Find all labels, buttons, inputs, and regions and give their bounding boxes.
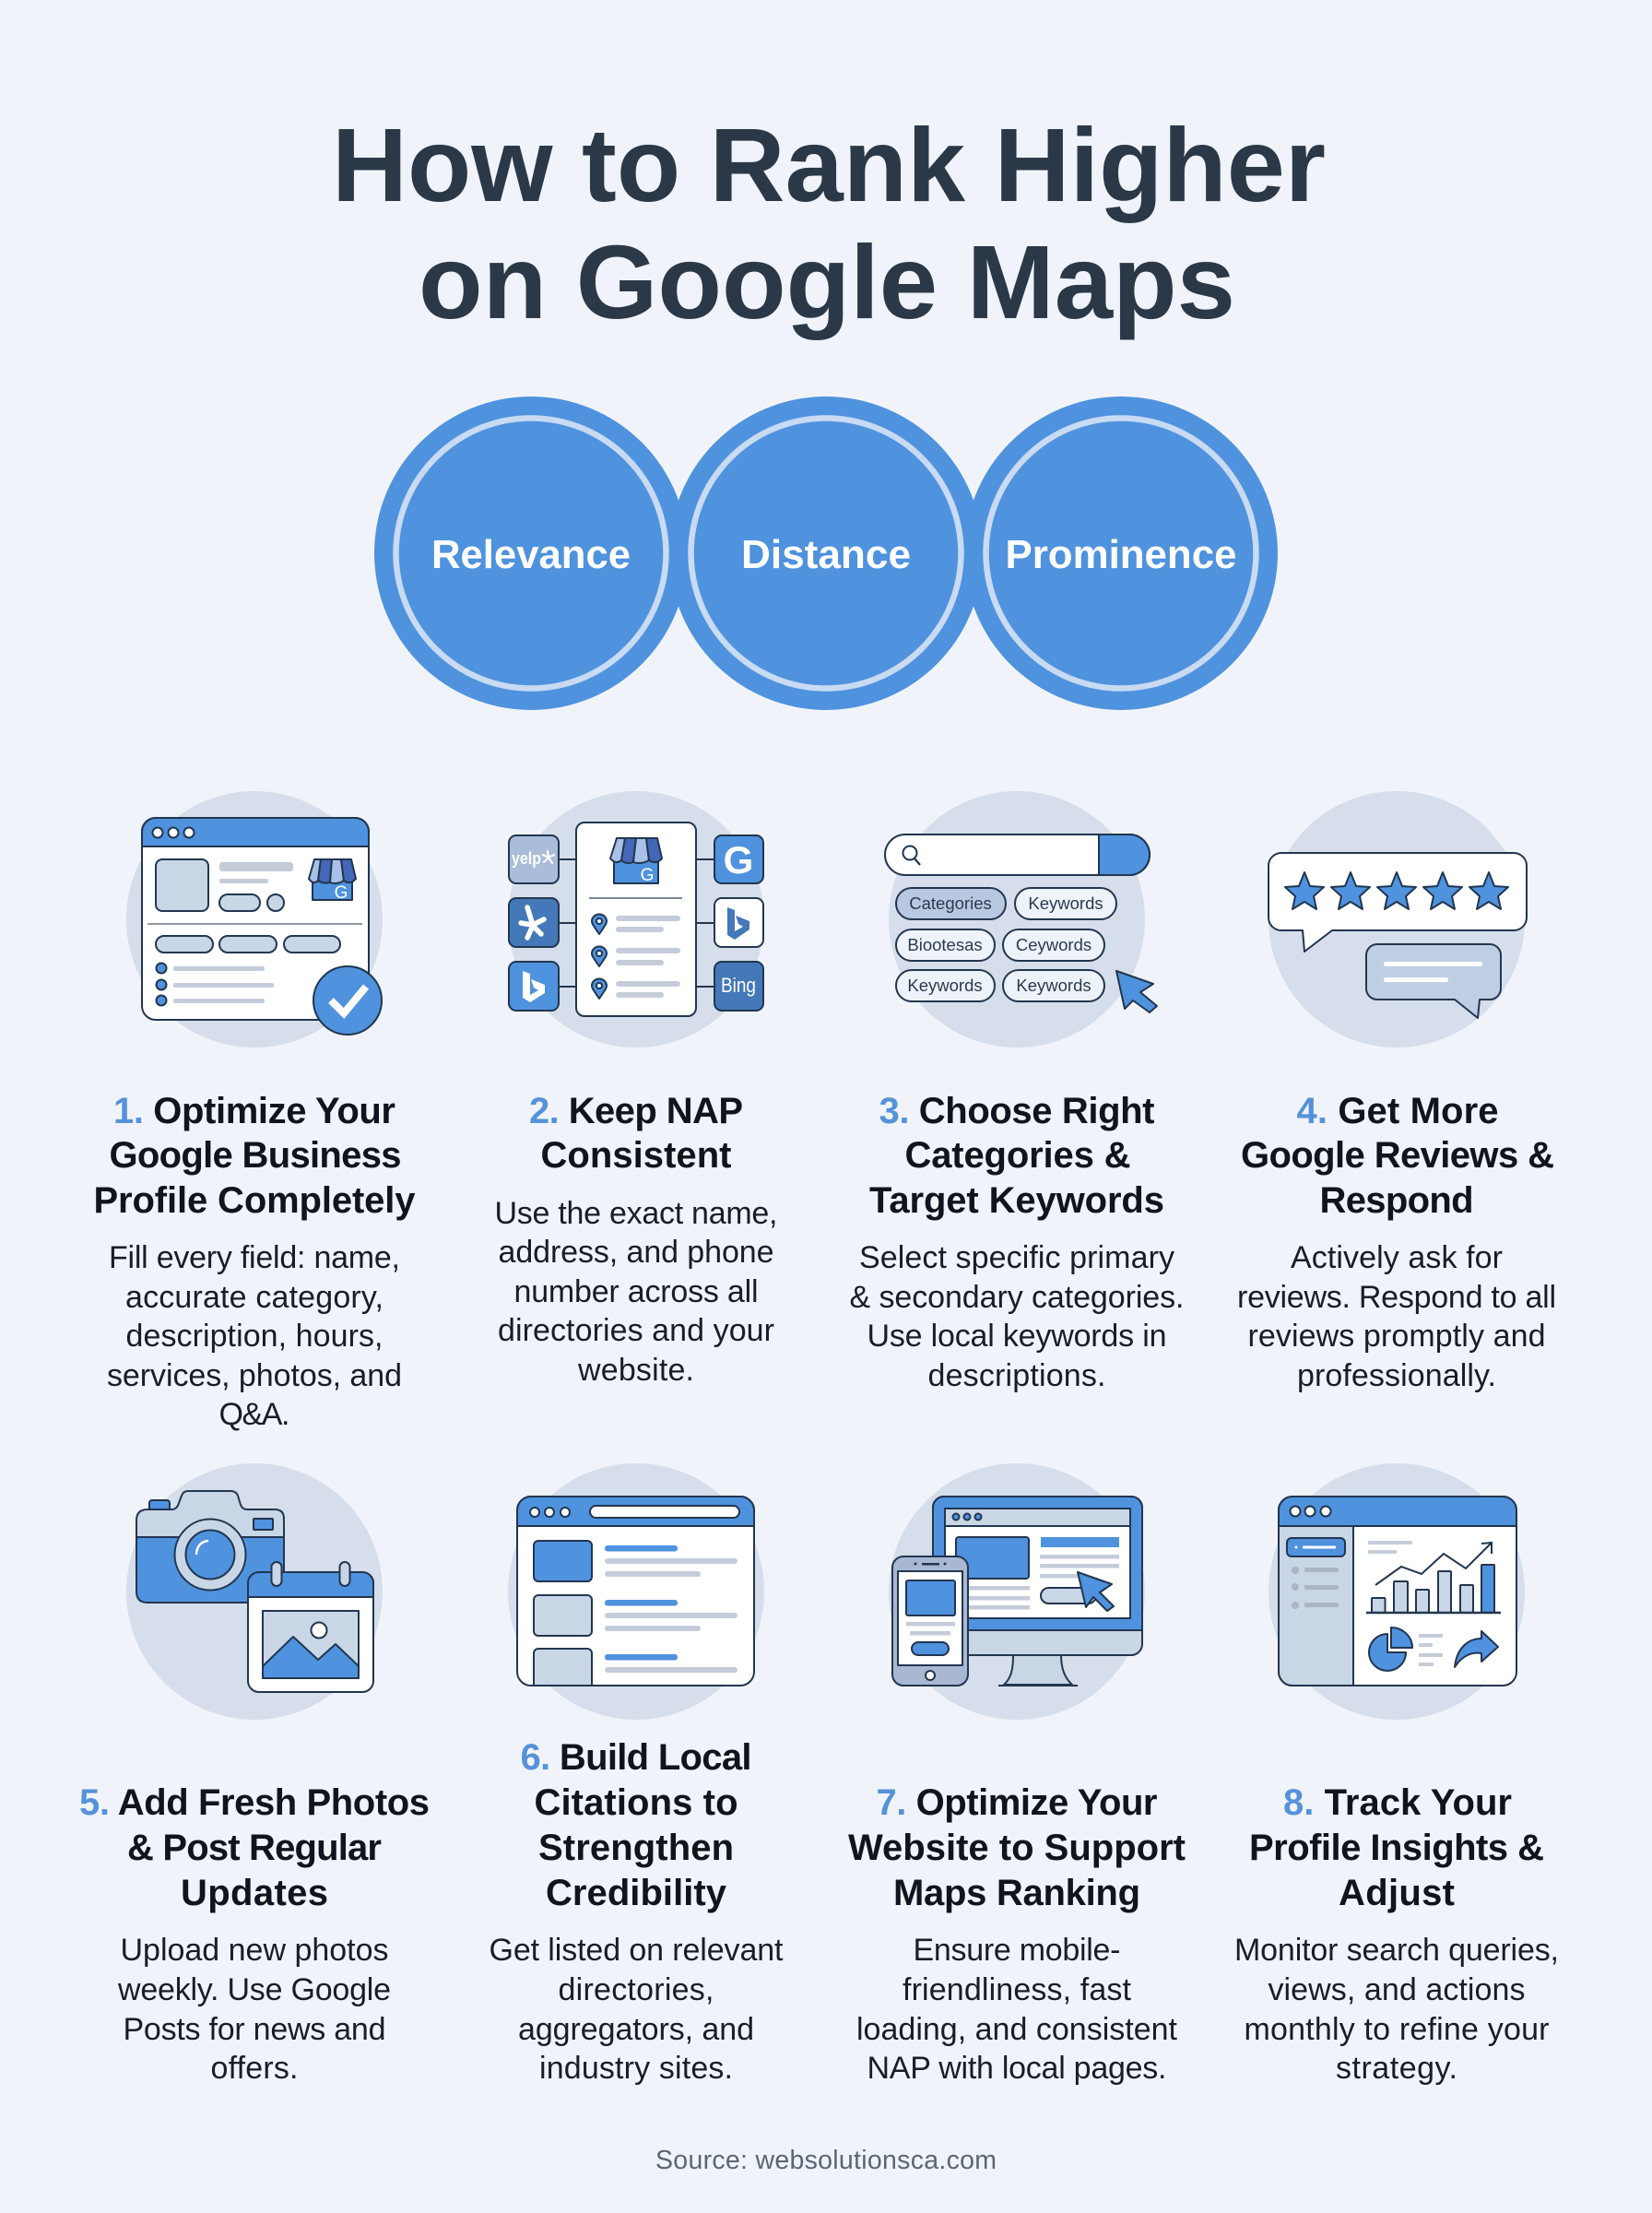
description: accurate category, [125,1280,384,1315]
heading: Adjust [1339,1873,1455,1913]
icon: business profile browser with check [126,791,383,1047]
icon: search bar with keyword chips [885,791,1157,1047]
description: Posts for news and [124,2012,385,2047]
icon: listing card with directory tiles: G [724,838,753,882]
description: friendliness, fast [903,1972,1132,2007]
description: Upload new photos [120,1933,389,1968]
panel: step 1 optimize profile [94,791,416,1432]
heading: Target Keywords [869,1180,1164,1221]
heading: 6. Build Local [520,1737,752,1778]
heading: Credibility [546,1873,727,1913]
heading [529,1091,743,1176]
panel: step 3 categories and keywords [850,791,1184,1393]
description: professionally. [1297,1358,1496,1393]
description: directories and your [498,1313,774,1348]
description: Actively ask for [1291,1240,1503,1275]
ranking factor circles [374,396,1278,710]
factor: prominence [964,396,1278,710]
heading: Maps Ranking [893,1873,1140,1913]
factor: distance: Distance [741,532,911,577]
icon: camera and calendar [126,1463,383,1720]
description: industry sites. [539,2051,733,2086]
icon: business profile browser with check: G [335,883,348,903]
heading: 7. Optimize Your [876,1782,1158,1823]
description [1234,1933,1559,2086]
heading: 8. Track Your [1283,1782,1512,1823]
description [856,1933,1178,2086]
icon: search bar with keyword chips: Categories [909,893,992,913]
description: Ensure mobile- [913,1933,1121,1968]
title: How to Rank Higher [332,107,1326,223]
heading: 3. Choose Right [879,1091,1154,1131]
description: reviews promptly and [1248,1319,1545,1354]
description: directories, [559,1972,714,2007]
icon: search bar with keyword chips: Keywords [1028,893,1103,913]
title: on Google Maps [419,224,1235,340]
description: Use the exact name, [494,1196,778,1231]
icon: listing card with directory tiles [508,791,764,1047]
icon: search bar with keyword chips: Ceywords [1016,935,1092,954]
heading [520,1737,752,1913]
icon: search bar with keyword chips: Keywords [907,976,983,995]
factor: prominence: Prominence [1005,532,1237,577]
icon: search bar with keyword chips: Keywords [1016,976,1092,995]
description [850,1240,1184,1393]
heading [1241,1091,1554,1221]
heading: Website to Support [848,1828,1186,1868]
heading: Consistent [540,1135,732,1176]
description: Q&A. [219,1397,289,1432]
description: Select specific primary [859,1240,1174,1275]
heading [869,1091,1164,1221]
description: Use local keywords in [867,1319,1167,1354]
description: Fill every field: name, [109,1240,400,1275]
icon: review bubbles with stars [1268,791,1527,1047]
icon: directory browser [508,1463,764,1720]
heading [94,1091,416,1221]
panel: step 7 optimize website [848,1463,1186,2086]
heading: Profile Completely [94,1180,416,1221]
description: NAP with local pages. [867,2051,1167,2086]
heading: Profile Insights & [1249,1828,1544,1868]
heading: Updates [181,1873,328,1913]
description: Monitor search queries, [1234,1933,1559,1968]
icon: listing card with directory tiles: Bing [721,974,756,997]
heading [1249,1782,1544,1913]
description: aggregators, and [518,2012,754,2047]
description: address, and phone [498,1235,774,1270]
description: monthly to refine your [1245,2012,1549,2047]
factor: relevance [374,396,688,710]
panel: step 4 get reviews [1237,791,1556,1393]
heading: 1. Optimize Your [113,1091,395,1131]
icon: desktop and phone [889,1463,1145,1720]
panel: step 5 fresh photos and posts [79,1463,430,2086]
description: offers. [210,2051,299,2086]
heading: Google Reviews & [1241,1135,1554,1176]
description: & secondary categories. [850,1280,1184,1315]
description: views, and actions [1268,1972,1525,2007]
icon: search bar with keyword chips: Biootesas [907,935,983,954]
heading [848,1782,1186,1913]
heading [79,1782,430,1913]
description: website. [577,1353,694,1388]
description: Get listed on relevant [489,1933,784,1968]
panel: step 2 keep NAP consistent [494,791,778,1388]
description: descriptions. [927,1358,1106,1393]
panel: step 6 local citations [489,1463,784,2086]
heading: Strengthen [538,1828,734,1868]
source line: Source: websolutionsca.com [655,2146,997,2175]
heading: 4. Get More [1296,1091,1499,1131]
factor: relevance: Relevance [431,532,631,577]
panel: step 8 track insights [1234,1463,1559,2086]
description: weekly. Use Google [117,1972,391,2007]
heading: Respond [1320,1180,1473,1221]
icon: analytics dashboard [1268,1463,1525,1720]
heading: 2. Keep NAP [529,1091,743,1131]
description [489,1933,784,2086]
description: loading, and consistent [856,2012,1178,2047]
heading: & Post Regular [127,1828,382,1868]
heading: Citations to [535,1782,738,1823]
factor: distance [669,396,983,710]
heading: Google Business [109,1135,402,1176]
title [332,107,1326,340]
description [494,1196,778,1388]
description: reviews. Respond to all [1237,1280,1556,1315]
description: strategy. [1336,2051,1457,2086]
heading: 5. Add Fresh Photos [79,1782,430,1823]
heading: Categories & [905,1135,1130,1176]
description [1237,1240,1556,1393]
description: description, hours, [125,1319,384,1354]
description: services, photos, and [107,1358,402,1393]
description [107,1240,402,1432]
icon: listing card with directory tiles: yelp [512,849,541,868]
description [117,1933,391,2086]
icon: listing card with directory tiles: G [641,866,654,885]
description: number across all [514,1274,758,1309]
